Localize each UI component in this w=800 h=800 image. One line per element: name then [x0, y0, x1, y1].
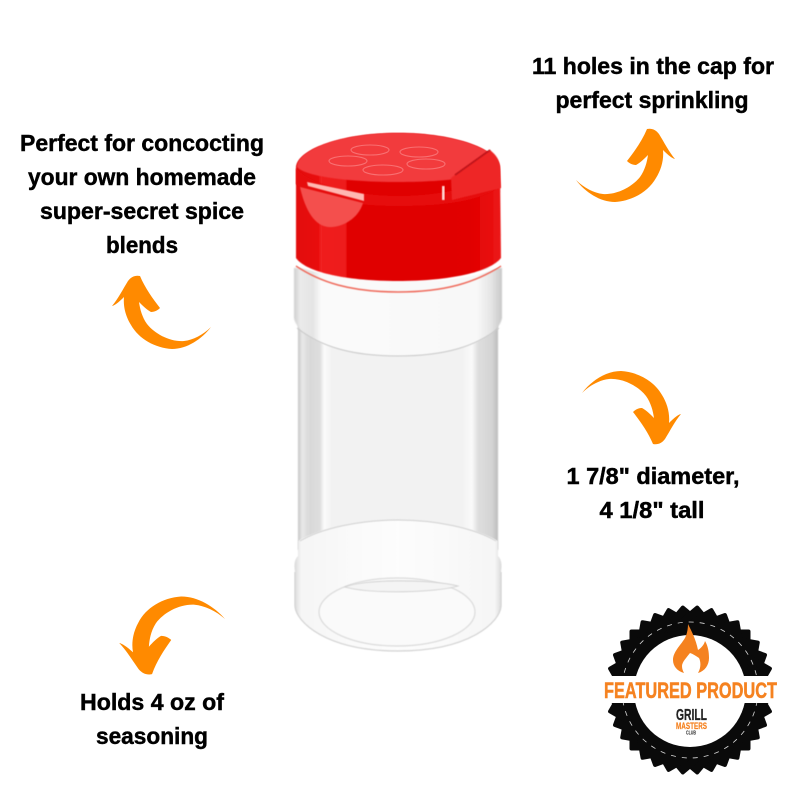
arrow: right pointing down to dimensions: [582, 371, 681, 444]
arrow: left pointing up to text: [112, 276, 211, 349]
text: cap holes: 11 holes in the cap for: [532, 53, 774, 79]
text: homemade blends: super-secret spice: [40, 198, 244, 224]
arrow: bottom left pointing down to capacity: [116, 596, 229, 675]
jar main body: [298, 320, 498, 550]
jar base inner ring: [319, 578, 475, 646]
text: cap holes: perfect sprinkling: [556, 87, 748, 113]
text: dimensions: 4 1/8" tall: [600, 497, 704, 523]
badge scalloped seal: [605, 605, 775, 775]
cap opening highlight: [300, 187, 363, 227]
badge white band: [598, 676, 782, 703]
badge logo MASTERS: MASTERS: [676, 721, 707, 732]
text: homemade blends: Perfect for concocting: [20, 130, 264, 156]
arrow: top right pointing up to cap: [576, 129, 675, 202]
jar neck ring: [296, 266, 501, 292]
jar base outline: [295, 572, 501, 651]
text: capacity: Holds 4 oz of: [80, 689, 224, 715]
plastic spice jar with red cap: [294, 133, 502, 651]
text: homemade blends: your own homemade: [28, 164, 256, 190]
badge logo GRILL: GRILL: [676, 707, 707, 724]
text: dimensions: 1 7/8" diameter,: [566, 463, 740, 489]
badge white centre: [634, 635, 746, 747]
cap flap right side: [451, 150, 501, 200]
text: cap holes: [532, 53, 774, 113]
cap white glint right: [442, 186, 445, 200]
badge: featured product: [598, 605, 782, 775]
cap top surface: [297, 133, 500, 182]
cap dispensing holes: [329, 145, 445, 175]
text: homemade blends: blends: [106, 232, 178, 258]
text: capacity: seasoning: [96, 723, 208, 749]
jar shoulder: [294, 268, 502, 356]
text: homemade blends: [20, 130, 264, 258]
cap lip band: [296, 168, 500, 206]
badge flame icon: [673, 624, 709, 673]
text: capacity: [80, 689, 224, 749]
red cap side: [296, 133, 501, 281]
jar base bottom dimple: [345, 581, 458, 592]
badge logo CLUB: CLUB: [686, 730, 696, 736]
jar shoulder seam: [297, 328, 499, 356]
cap white glint left: [307, 182, 364, 201]
text: dimensions: [566, 463, 740, 523]
badge stitched ring: [622, 622, 758, 758]
jar base: [294, 520, 502, 651]
cap flap slit: [455, 150, 490, 175]
jar base top arc: [300, 520, 496, 541]
